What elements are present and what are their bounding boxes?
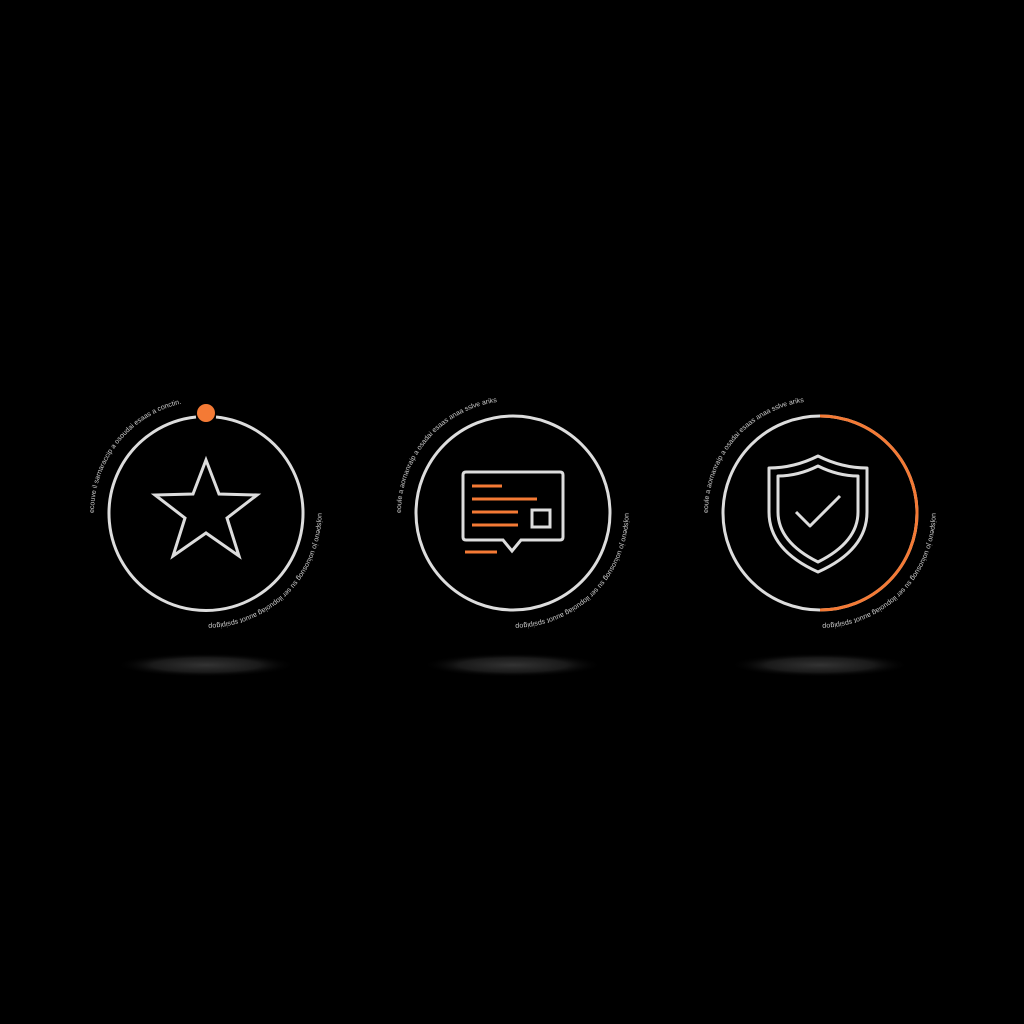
- panel: star badge: [90, 400, 323, 674]
- icon: orange dot: [197, 404, 215, 422]
- panel: shield badge: [704, 398, 937, 674]
- panel: star badge: uojspeuo jo uoiuosuog su ser ilopuoiag auuot spsipigop: [208, 514, 323, 628]
- curved caption: ecouve il sarnaraccip a osoudai esaas a conctin.: [90, 400, 181, 513]
- curved caption: eoule a aornanraip a osadai esaas anaa sslve ariks: [704, 398, 804, 513]
- icon: message card: [463, 472, 563, 552]
- panel: message card badge: uojspeuo jo uoiuosuog su ser ilopuoiag auuot spsipigop: [516, 514, 630, 628]
- panel: message card badge: [396, 398, 630, 674]
- curved caption: eoule a aornanraip a osadai esaas anaa sslve ariks: [396, 398, 497, 513]
- panel: shield badge: uojspeuo jo uoiuosuog su ser ilopuoiag auuot spsipigop: [822, 514, 937, 628]
- progress arc: [820, 416, 917, 610]
- icon: star: [155, 460, 257, 556]
- icon: shield check: [769, 456, 867, 572]
